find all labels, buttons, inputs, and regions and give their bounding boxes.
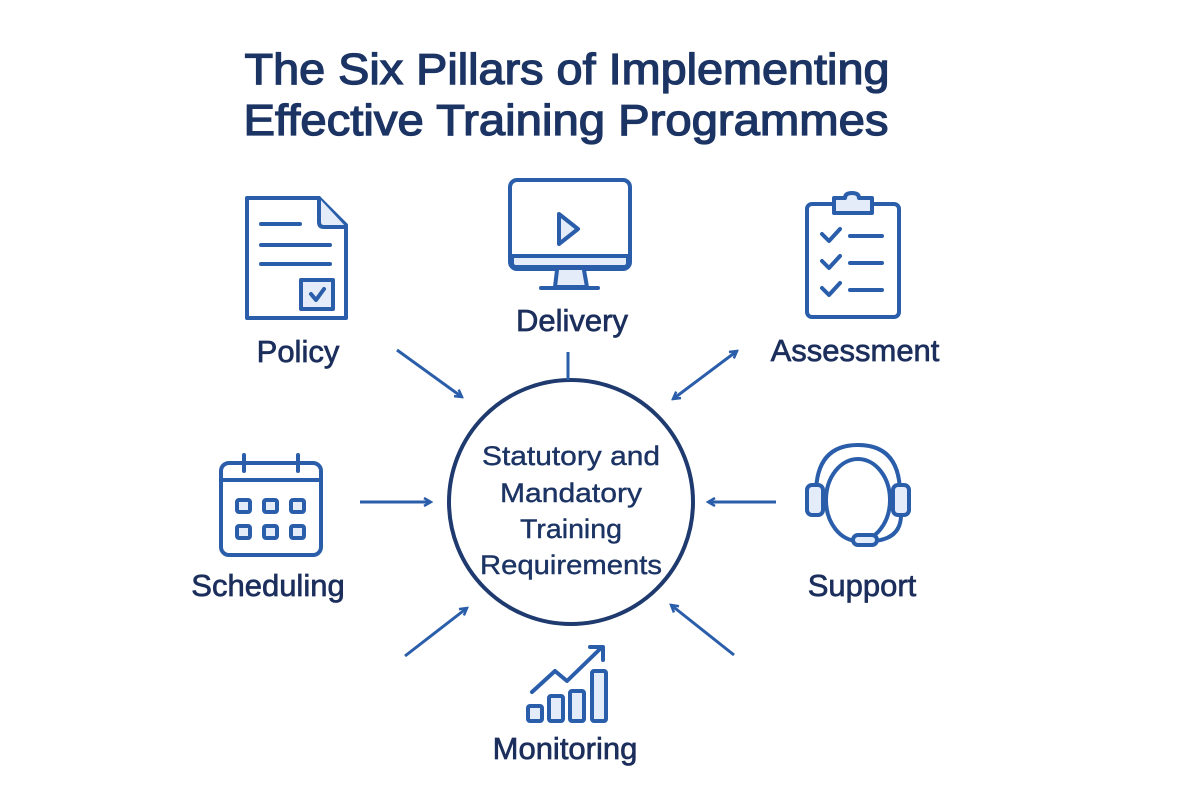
title: Effective Training Programmes — [244, 96, 888, 145]
icon: document — [247, 198, 346, 318]
central circle: Mandatory — [500, 478, 643, 508]
pillar: delivery — [510, 180, 630, 338]
label: Monitoring: Monitoring — [493, 731, 637, 766]
label: Scheduling: Scheduling — [191, 568, 345, 603]
central circle — [449, 380, 693, 624]
label: Assessment: Assessment — [771, 333, 940, 368]
title: The Six Pillars of Implementing — [244, 45, 890, 94]
pillar: support — [807, 445, 917, 603]
icon: monitor — [510, 180, 630, 288]
pillar: policy — [247, 198, 346, 369]
label: Policy: Policy — [257, 334, 340, 369]
pillar: assessment — [771, 193, 940, 368]
label: Support: Support — [808, 568, 917, 603]
central circle: Statutory and — [482, 441, 660, 471]
label: Delivery: Delivery — [516, 303, 628, 338]
pillar: monitoring — [493, 647, 637, 766]
title — [244, 45, 890, 145]
icon: calendar — [221, 455, 321, 555]
icon: headset — [807, 445, 909, 545]
icon: bar chart — [528, 647, 606, 721]
central circle: Requirements — [480, 550, 662, 580]
central circle: Training — [520, 514, 622, 544]
icon: clipboard — [807, 193, 899, 317]
pillar: scheduling — [191, 455, 345, 603]
arrows — [360, 350, 776, 656]
